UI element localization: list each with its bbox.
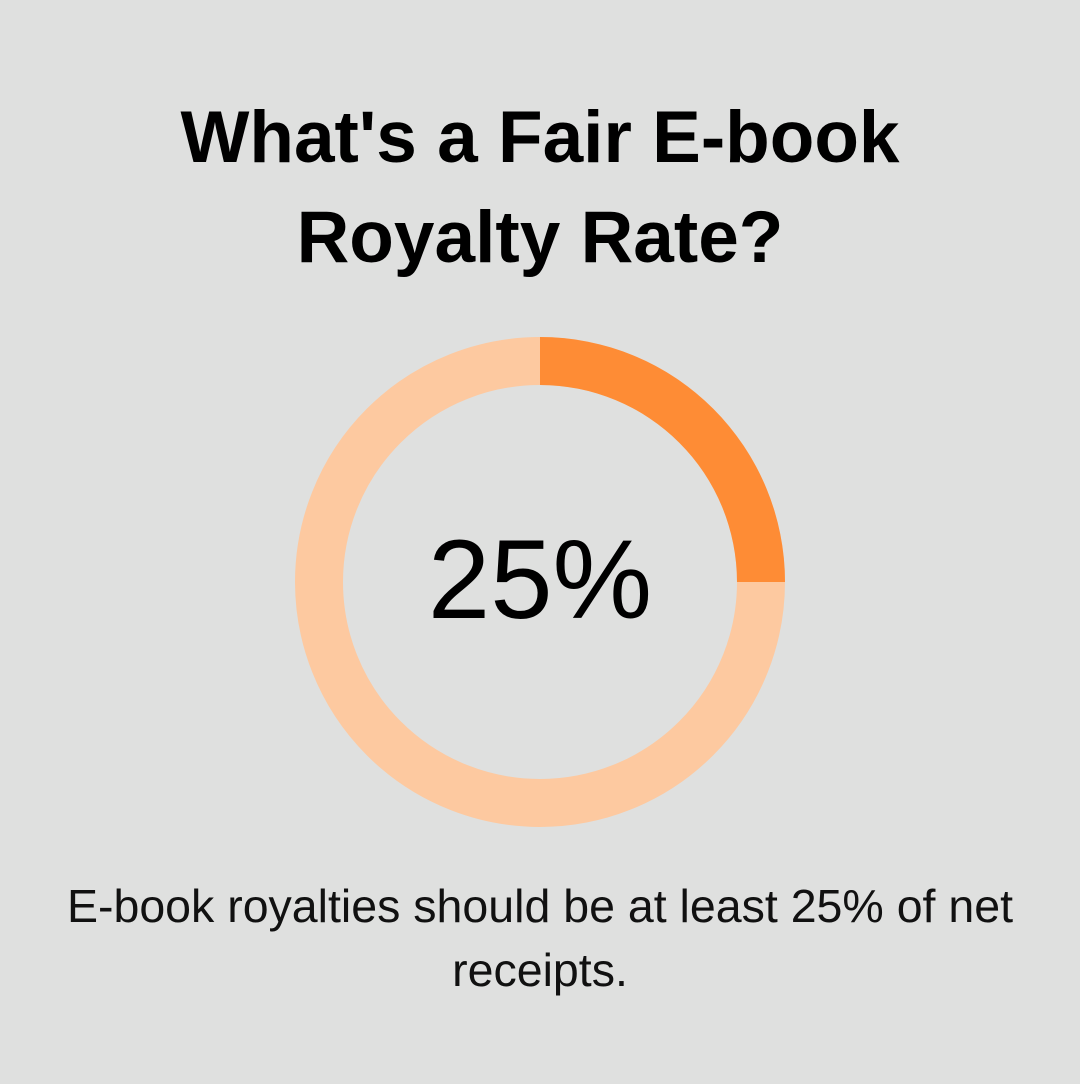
title: Royalty Rate? (297, 197, 783, 278)
donut chart (295, 337, 785, 827)
title: What's a Fair E-book (180, 97, 900, 178)
caption (67, 880, 1013, 996)
caption: E-book royalties should be at least 25% of net (67, 880, 1013, 932)
donut segment 25% (540, 337, 785, 582)
caption: receipts. (452, 944, 628, 996)
donut track (319, 361, 761, 803)
title (180, 97, 900, 278)
center value: 25% (428, 517, 652, 642)
